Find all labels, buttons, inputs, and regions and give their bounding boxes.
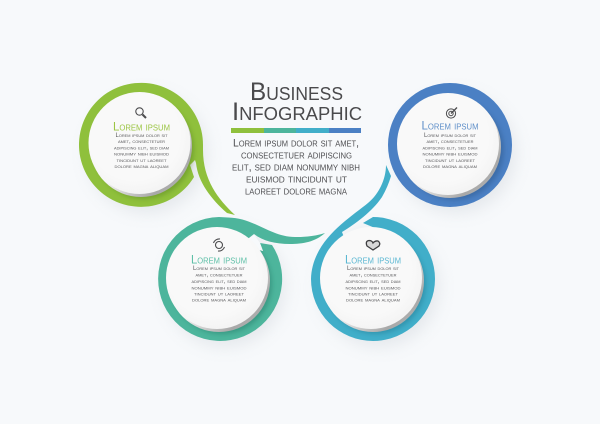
text block: tincidunt ut laoreet [194, 290, 245, 298]
light blue ribbon ring with tail [311, 165, 435, 341]
text block: nonummy nibh euismod [192, 284, 247, 292]
text block: Lorem ipsum dolor sit [347, 265, 400, 272]
panel: step 2 teal [158, 217, 325, 341]
green ribbon ring with tail [79, 83, 235, 215]
text block: nonummy nibh euismod [346, 284, 401, 292]
text block: amet, consectetuer [196, 272, 243, 278]
text block: adipiscing elit, sed diam [192, 278, 246, 285]
text block: amet, consectetuer [426, 138, 474, 145]
title: Business [250, 78, 343, 106]
text block: adipiscing elit, sed diam [422, 144, 478, 152]
disk side [399, 96, 501, 198]
heading: Lorem ipsum [191, 252, 247, 266]
title colour bar [231, 128, 361, 133]
text block: tincidunt ut laoreet [348, 290, 399, 298]
intro text: Lorem ipsum dolor sit amet, [233, 138, 359, 150]
text block: nonummy nibh euismod [114, 150, 169, 158]
icon: target [446, 108, 457, 118]
blue ring [388, 83, 512, 207]
title: Infographic [232, 98, 362, 126]
text block: dolore magna aliquam [423, 163, 477, 170]
text block: tincidunt ut laoreet [116, 157, 167, 164]
text block [192, 265, 247, 304]
panel: step 3 light blue [311, 165, 435, 341]
disk top [320, 227, 422, 329]
disk shadow on ring [172, 234, 272, 334]
heading: Lorem ipsum [345, 252, 401, 266]
title [232, 78, 362, 126]
heading: Lorem ipsum [113, 120, 170, 134]
disk side [168, 230, 270, 332]
text block [346, 265, 401, 304]
intro text: elit, sed diam nonummy nibh [232, 162, 360, 174]
heading: Lorem ipsum [422, 118, 479, 132]
intro text: consectetuer adipiscing [241, 150, 352, 162]
text block [114, 132, 169, 170]
teal ribbon ring with tail [158, 217, 325, 341]
gap between tail and ring start [240, 234, 263, 251]
disk side [322, 230, 424, 332]
disk side [90, 95, 192, 197]
text block: Lorem ipsum dolor sit [424, 132, 477, 139]
soft outer shadows [87, 93, 516, 347]
intro text [232, 138, 360, 198]
panel: step 1 green [79, 83, 235, 215]
disk top [88, 92, 190, 194]
text block [422, 132, 478, 170]
text block: amet, consectetuer [118, 138, 165, 145]
icon: magnifier [136, 108, 146, 118]
text block: dolore magna aliquam [346, 296, 400, 304]
text block: tincidunt ut laoreet [425, 157, 476, 164]
intro text: euismod tincidunt ut [246, 174, 347, 186]
disk top [166, 227, 268, 329]
disk shadow on ring [94, 99, 194, 199]
text block: Lorem ipsum dolor sit [193, 265, 246, 272]
text block: dolore magna aliquam [192, 296, 246, 304]
intro text: laoreet dolore magna [245, 186, 348, 198]
text block: adipiscing elit, sed diam [346, 278, 400, 285]
icon: handshake heart [366, 240, 380, 250]
text block: dolore magna aliquam [114, 163, 168, 170]
text block: nonummy nibh euismod [422, 150, 478, 158]
text block: Lorem ipsum dolor sit [116, 132, 168, 139]
disk top [397, 93, 499, 195]
text block: amet, consectetuer [350, 272, 397, 278]
icon: rotating coin [214, 239, 224, 251]
disk shadow on ring [404, 100, 504, 200]
panel: step 4 blue [388, 83, 512, 207]
text block: adipiscing elit, sed diam [114, 144, 169, 152]
disk shadow on ring [326, 234, 426, 334]
